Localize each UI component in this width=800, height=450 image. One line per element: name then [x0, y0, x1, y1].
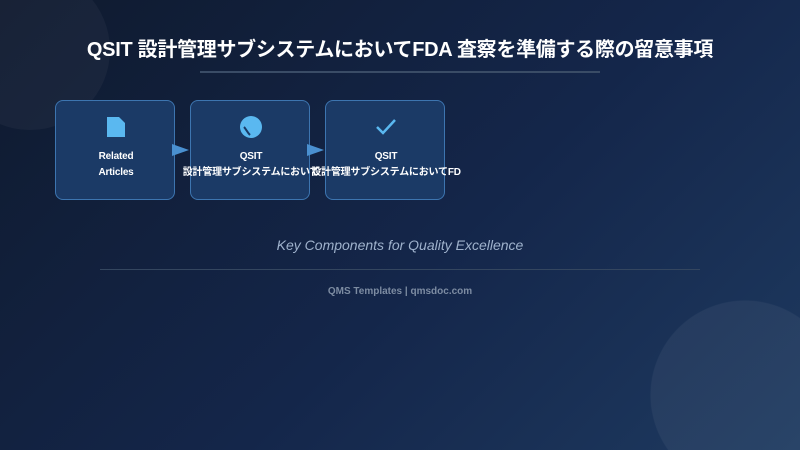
card: related articles: Articles — [98, 167, 134, 178]
card: QSIT 2: 設計管理サブシステムにおいてFD — [311, 167, 461, 178]
card: QSIT 1 — [190, 100, 310, 200]
title: QSIT 設計管理サブシステムにおいてFDA 査察を準備する際の留意事項 — [87, 39, 713, 61]
card: related articles — [55, 100, 175, 200]
icon: circle — [240, 116, 262, 138]
icon: check — [376, 119, 396, 135]
card: QSIT 2 — [325, 100, 445, 200]
footer: QMS Templates | qmsdoc.com — [328, 286, 472, 297]
card: related articles: Related — [99, 151, 133, 162]
icon: document — [107, 117, 125, 137]
card: QSIT 1: 設計管理サブシステムにおいて — [183, 167, 319, 178]
subtitle: Key Components for Quality Excellence — [277, 237, 523, 253]
arrow 2 — [307, 144, 324, 156]
card: QSIT 1: QSIT — [240, 151, 262, 162]
arrow 1 — [172, 144, 189, 156]
card: QSIT 2: QSIT — [375, 151, 397, 162]
